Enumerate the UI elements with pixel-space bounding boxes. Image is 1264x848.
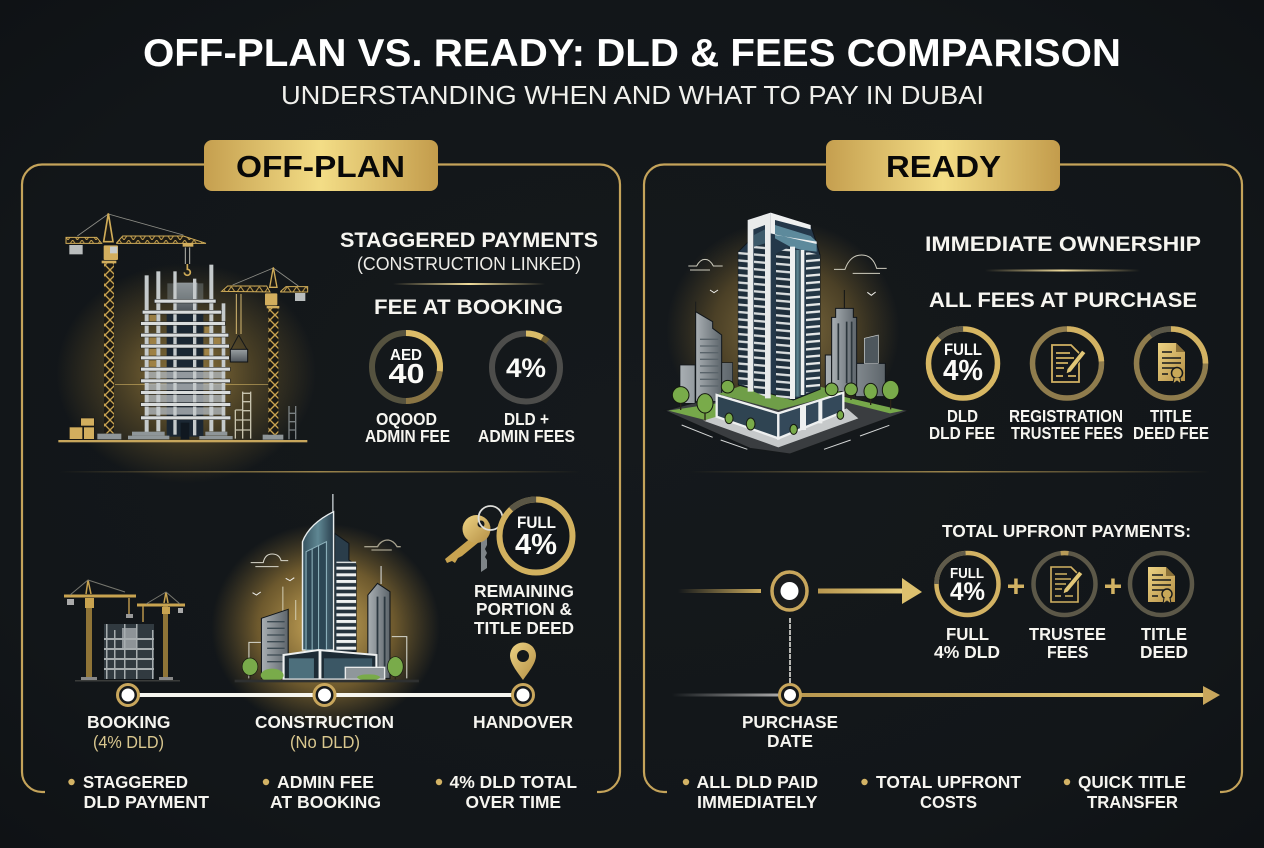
icon: plus <box>1008 578 1024 594</box>
metric: full 4% dld fee: FULL <box>944 340 982 359</box>
metric: registration trustee fees: TRUSTEE FEES <box>1011 423 1123 443</box>
label: construction: (No DLD) <box>290 732 360 752</box>
bullet: 4% dld total over time <box>436 772 577 812</box>
icon: title deed document <box>1148 567 1175 604</box>
crates <box>69 418 94 439</box>
small crane <box>222 267 308 435</box>
metric: title deed fee: DEED FEE <box>1133 423 1209 443</box>
metric: full 4% dld upfront: 4% <box>950 578 985 606</box>
metric: full 4% dld upfront: FULL <box>946 624 989 644</box>
bullet: total upfront costs: COSTS <box>920 792 977 812</box>
icon: document with pen <box>1051 567 1083 602</box>
heading: fee at booking: FEE AT BOOKING <box>374 296 563 319</box>
metric: registration trustee fees <box>1009 329 1123 443</box>
label: purchase date <box>742 712 838 751</box>
title: OFF-PLAN VS. READY: DLD & FEES COMPARISON <box>143 32 1121 75</box>
bullet: staggered dld payment <box>68 772 209 812</box>
bullet: all dld paid immediately: IMMEDIATELY <box>697 792 818 812</box>
badge: ready <box>826 140 1060 191</box>
label: purchase date: PURCHASE <box>742 712 838 732</box>
label: booking <box>87 712 170 752</box>
bullet: all dld paid immediately <box>683 772 818 812</box>
bullet: total upfront costs: TOTAL UPFRONT <box>876 772 1021 792</box>
metric: full 4% remaining portion and title deed: 4% <box>515 529 557 561</box>
heading: immediate ownership: IMMEDIATE OWNERSHIP <box>925 233 1201 256</box>
heading: all fees at purchase: ALL FEES AT PURCHASE <box>929 289 1197 312</box>
metric: title deed fee <box>1123 315 1219 443</box>
panel: off-plan <box>22 140 620 812</box>
metric: full 4% dld fee: DLD <box>947 406 978 426</box>
text: staggered payments: (CONSTRUCTION LINKED) <box>357 254 581 274</box>
timeline: booking to handover <box>118 684 534 706</box>
metric: full 4% dld fee: DLD FEE <box>929 423 995 443</box>
metric: title deed upfront: TITLE <box>1141 624 1187 644</box>
label: purchase date: DATE <box>767 731 813 751</box>
label: construction: CONSTRUCTION <box>255 712 394 732</box>
text: staggered payments: STAGGERED PAYMENTS <box>340 229 598 252</box>
icon: plus <box>1105 578 1121 594</box>
metric: title deed upfront: DEED <box>1140 642 1188 662</box>
subtitle: UNDERSTANDING WHEN AND WHAT TO PAY IN DUBAI <box>281 80 984 110</box>
label: handover: HANDOVER <box>473 712 573 732</box>
label: booking: BOOKING <box>87 712 170 732</box>
icon: keys <box>445 506 502 572</box>
metric: AED 40 oqood admin fee: AED <box>390 347 422 364</box>
bullet: total upfront costs <box>861 772 1021 812</box>
badge: off-plan <box>204 140 438 191</box>
arrow: purchase leads to fees <box>678 572 922 685</box>
illustration: ready high-rise tower <box>665 213 908 454</box>
label: booking: (4% DLD) <box>93 732 164 752</box>
metric: full 4% dld upfront: 4% DLD <box>934 642 1000 662</box>
metric: full 4% remaining portion and title deed: PORTION & <box>476 599 572 619</box>
timeline arrow: purchase date <box>672 684 1220 706</box>
metric: 4% dld + admin fees: 4% <box>506 353 546 383</box>
metric: full 4% dld fee: 4% <box>943 355 983 387</box>
metric: full 4% remaining portion and title deed <box>474 484 588 638</box>
metric: trustee fees upfront <box>1029 549 1106 662</box>
metric: AED 40 oqood admin fee <box>365 333 450 446</box>
icon: location pin <box>510 642 536 680</box>
metric: full 4% remaining portion and title deed: TITLE DEED <box>474 618 574 638</box>
metric: trustee fees upfront: FEES <box>1047 642 1088 662</box>
text: staggered payments <box>340 229 598 274</box>
bullet: 4% dld total over time: OVER TIME <box>466 792 561 812</box>
metric: title deed upfront <box>1130 553 1192 662</box>
metric: full 4% dld upfront <box>934 553 1000 662</box>
bullet: quick title transfer <box>1064 772 1186 812</box>
label: construction <box>255 712 394 752</box>
metric: full 4% remaining portion and title deed: FULL <box>517 513 556 532</box>
badge: ready: READY <box>886 149 1001 184</box>
metric: title deed fee: TITLE <box>1150 406 1192 426</box>
bullet: all dld paid immediately: ALL DLD PAID <box>696 772 818 792</box>
bullet: staggered dld payment: STAGGERED <box>83 772 188 792</box>
metric: registration trustee fees: REGISTRATION <box>1009 406 1123 426</box>
bullet: quick title transfer: TRANSFER <box>1087 792 1178 812</box>
metric: full 4% dld fee <box>914 315 1012 443</box>
metric: 4% dld + admin fees <box>478 334 575 446</box>
badge: off-plan: OFF-PLAN <box>236 149 405 184</box>
metric: AED 40 oqood admin fee: 40 <box>388 358 424 389</box>
ladders <box>235 392 251 439</box>
illustration: completed city skyline <box>211 494 440 730</box>
illustration: building under construction with cranes <box>57 213 317 483</box>
metric: trustee fees upfront: TRUSTEE <box>1029 624 1106 644</box>
bullet: admin fee at booking: AT BOOKING <box>270 792 381 812</box>
bullet: staggered dld payment: DLD PAYMENT <box>84 792 209 812</box>
metric: AED 40 oqood admin fee: ADMIN FEE <box>365 426 450 446</box>
metric: full 4% dld upfront: FULL <box>950 565 984 582</box>
illustration: small cranes at booking <box>64 580 185 682</box>
big crane <box>66 213 206 433</box>
bullet: admin fee at booking: ADMIN FEE <box>277 772 374 792</box>
heading: total upfront payments: TOTAL UPFRONT PAYMENTS: <box>942 521 1191 541</box>
bullet: 4% dld total over time: 4% DLD TOTAL <box>450 772 577 792</box>
metric: full 4% remaining portion and title deed: REMAINING <box>474 581 574 601</box>
bullet: admin fee at booking <box>263 772 381 812</box>
metric: 4% dld + admin fees: ADMIN FEES <box>478 426 575 446</box>
icon: title deed document <box>1158 343 1185 384</box>
panel frame: ready <box>644 164 1242 792</box>
metric: 4% dld + admin fees: DLD + <box>504 409 549 429</box>
panel frame: off-plan <box>22 164 620 792</box>
icon: document with pen <box>1052 345 1086 382</box>
bullet: quick title transfer: QUICK TITLE <box>1078 772 1186 792</box>
podium roof grass <box>718 383 843 410</box>
panel: ready <box>644 140 1242 812</box>
metric: AED 40 oqood admin fee: OQOOD <box>376 409 437 429</box>
